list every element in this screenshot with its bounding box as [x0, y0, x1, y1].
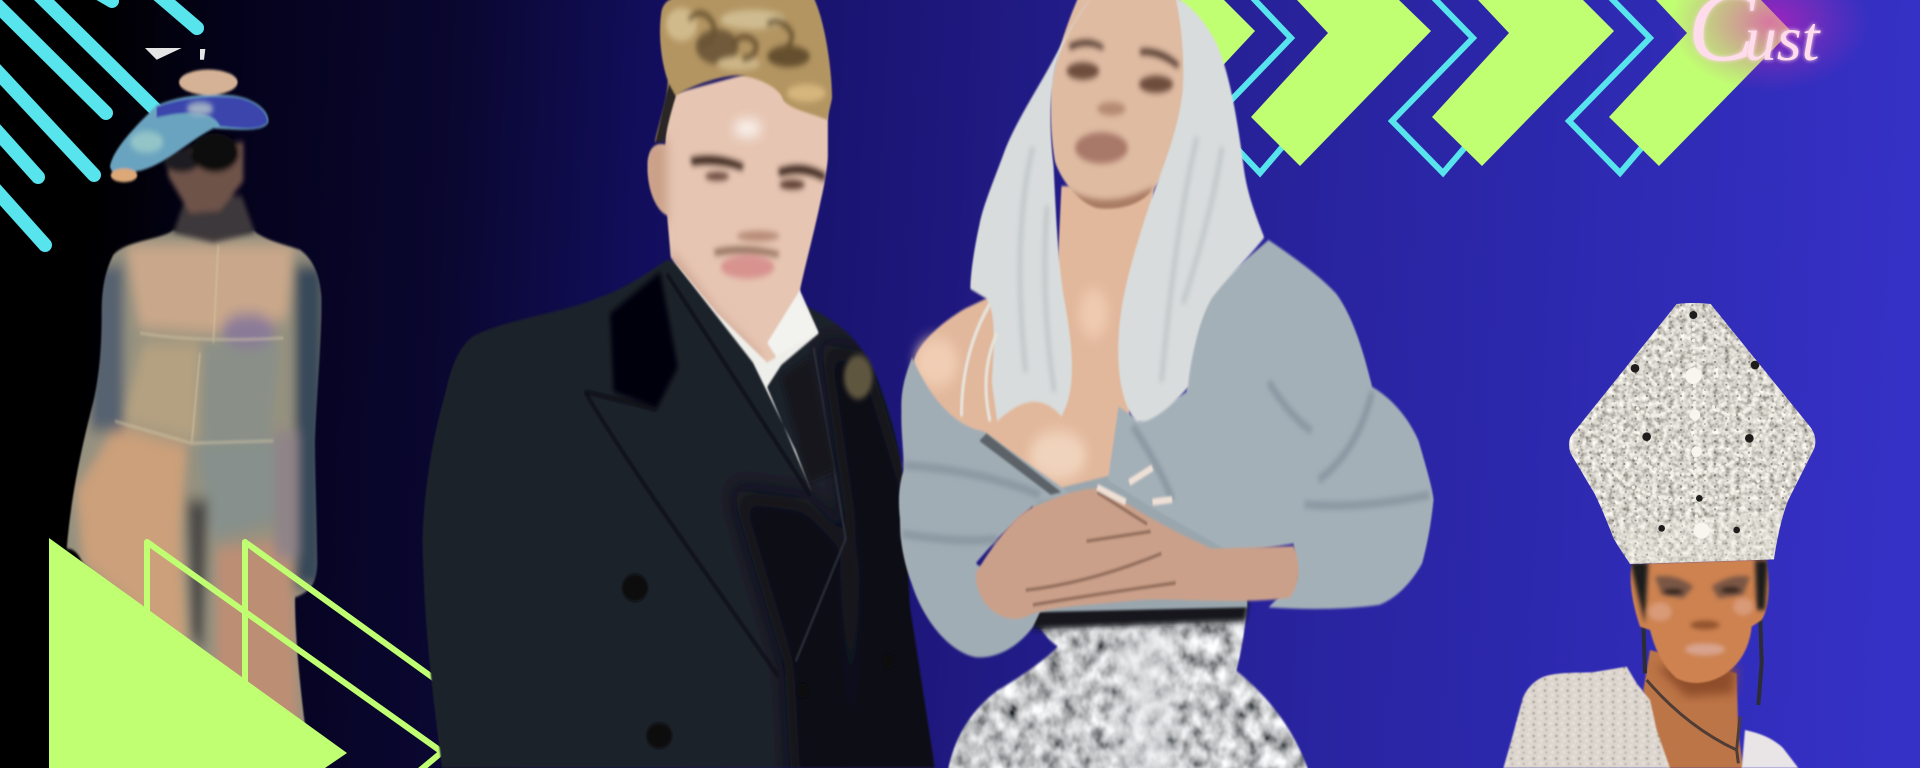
wispy strands on shoulder: [961, 304, 997, 421]
jewelled mitre: [1567, 300, 1820, 567]
sweater neckline edge: [979, 433, 1061, 495]
pearl shoulder: [1503, 667, 1670, 768]
dark tie: [781, 358, 835, 482]
chevrons: outlined cyan: [1211, 0, 1650, 173]
grey sweater: [899, 240, 1434, 657]
face: [1047, 0, 1190, 216]
neck and face: [163, 133, 255, 242]
chevrons: solid lime: [1170, 0, 1791, 166]
figure: left, sheer gown and wide hat: [60, 48, 327, 768]
lime outline triangles: [147, 542, 450, 768]
hair strands: [1643, 610, 1762, 705]
gown body: [66, 229, 322, 723]
figure: woman with platinum hair: [899, 0, 1434, 768]
curly blond hair: [654, 0, 833, 144]
head: [642, 59, 828, 372]
platinum hair: [970, 0, 1264, 422]
cyan diagonal stripes: [0, 0, 197, 245]
mitre jewels: [1685, 368, 1710, 539]
corset highlight: [1119, 622, 1172, 768]
neck and chest: [1643, 650, 1743, 768]
figure: woman in jewelled mitre: [1503, 300, 1820, 768]
corset seams: [115, 245, 283, 443]
coat buttons: [622, 574, 894, 748]
small white fragments: [145, 48, 205, 60]
skin: neck and shoulders: [913, 186, 1154, 495]
white neckline: [1742, 730, 1798, 768]
velvet collar: [610, 272, 678, 409]
neon glow behind signature: [1670, 0, 1870, 92]
wide blue hat: [110, 70, 268, 182]
hands: [976, 468, 1299, 619]
dark double-breasted coat: [410, 245, 946, 768]
right lapel: [796, 348, 846, 661]
chest highlight: [915, 289, 1108, 480]
lapel brooch: [844, 355, 872, 399]
hair shading strands: [1020, 137, 1222, 392]
figure: man in dark suit: [410, 0, 946, 768]
silver corset and skirt: [947, 602, 1310, 768]
necklace: [1647, 680, 1740, 763]
mitre pearl strings: [1600, 323, 1797, 523]
lime solid triangle: [49, 538, 347, 768]
corset top shadow: [1029, 600, 1249, 629]
mitre bottom band: [1613, 510, 1783, 565]
white shirt: [671, 257, 819, 492]
face: [1630, 560, 1770, 684]
lapel lines: [585, 274, 810, 676]
sweater folds: [902, 382, 1429, 540]
